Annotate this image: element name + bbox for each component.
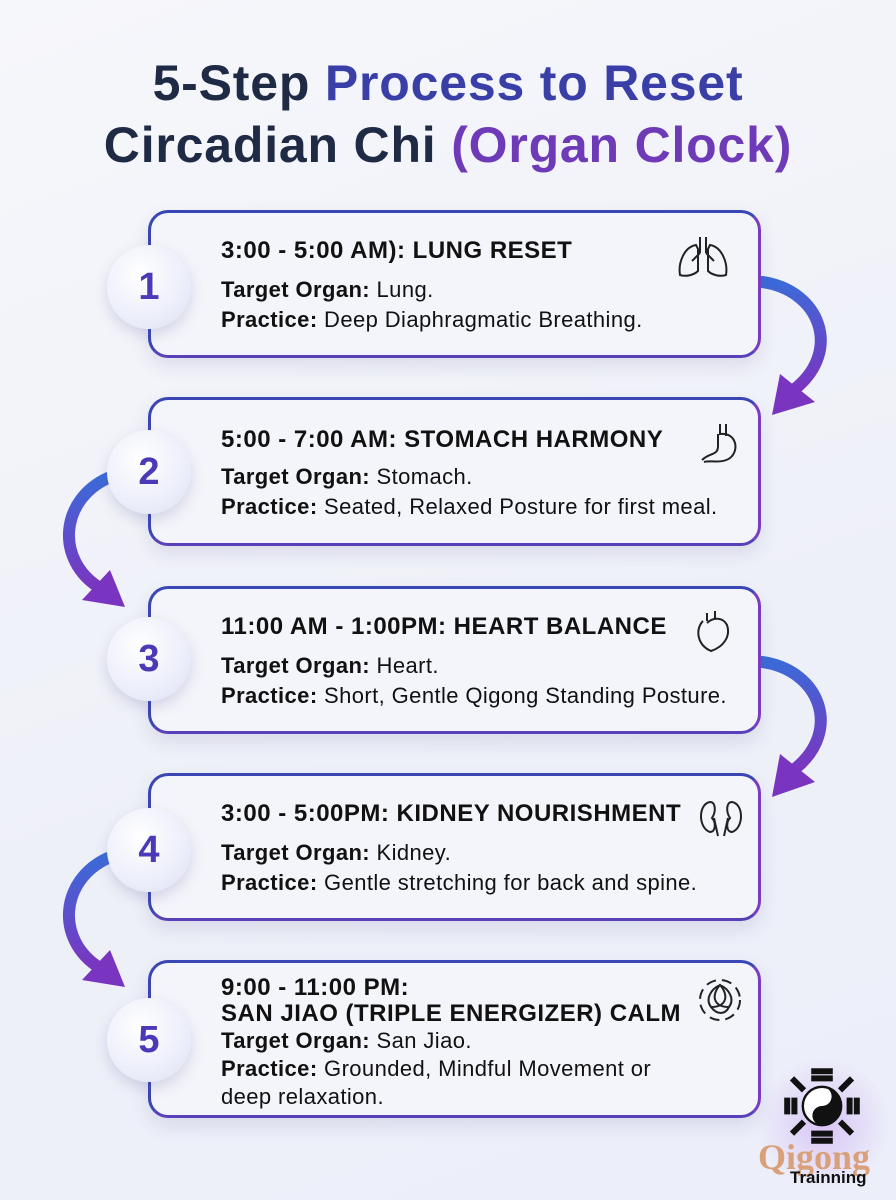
heading 5: 9:00 - 11:00 PM: bbox=[221, 974, 409, 1001]
icon: lungs bbox=[678, 237, 728, 277]
logo text: Qigong bbox=[758, 1137, 870, 1177]
title bbox=[104, 55, 792, 173]
text 4: Practice: Gentle stretching for back and spine. bbox=[221, 870, 697, 895]
icon: heart bbox=[697, 611, 730, 652]
title: Circadian Chi (Organ Clock) bbox=[104, 117, 792, 173]
circle 5 bbox=[107, 998, 191, 1082]
text 5: Target Organ: San Jiao. bbox=[221, 1028, 472, 1053]
heading 5: SAN JIAO (TRIPLE ENERGIZER) CALM bbox=[221, 1000, 681, 1027]
title: 5-Step Process to Reset bbox=[153, 55, 743, 111]
circle 1 bbox=[107, 245, 191, 329]
arrow 4 to 5 bbox=[69, 858, 125, 987]
text 4 bbox=[221, 840, 697, 895]
heading 3: 11:00 AM - 1:00PM: HEART BALANCE bbox=[221, 613, 667, 640]
logo bbox=[756, 1056, 892, 1192]
text 1: Practice: Deep Diaphragmatic Breathing. bbox=[221, 307, 643, 332]
panel: step 1 bbox=[148, 210, 761, 358]
text 1: Target Organ: Lung. bbox=[221, 277, 434, 302]
panel: step 3 bbox=[148, 586, 761, 734]
text 5 bbox=[221, 1028, 651, 1109]
logo mark bbox=[784, 1068, 860, 1144]
text 2: Practice: Seated, Relaxed Posture for first meal. bbox=[221, 494, 718, 519]
heading 1: 3:00 - 5:00 AM): LUNG RESET bbox=[221, 237, 572, 264]
arrow 1 to 2 bbox=[762, 282, 821, 415]
heading 4: 3:00 - 5:00PM: KIDNEY NOURISHMENT bbox=[221, 800, 681, 827]
icon: triple knot bbox=[699, 979, 741, 1021]
arrow 3 to 4 bbox=[762, 662, 821, 797]
text 3: Practice: Short, Gentle Qigong Standing Posture. bbox=[221, 683, 727, 708]
circle 4 bbox=[107, 808, 191, 892]
text 3: Target Organ: Heart. bbox=[221, 653, 439, 678]
circle 5: 5 bbox=[138, 1019, 160, 1061]
icon: stomach bbox=[701, 424, 736, 463]
text 2: Target Organ: Stomach. bbox=[221, 464, 473, 489]
text 4: Target Organ: Kidney. bbox=[221, 840, 451, 865]
circle 3: 3 bbox=[138, 638, 160, 680]
panel: step 4 bbox=[148, 773, 761, 921]
text 5: Practice: Grounded, Mindful Movement or bbox=[221, 1056, 651, 1081]
text 1 bbox=[221, 277, 643, 332]
circle 1: 1 bbox=[138, 266, 160, 308]
text 2 bbox=[221, 464, 718, 519]
heading 2: 5:00 - 7:00 AM: STOMACH HARMONY bbox=[221, 426, 663, 453]
icon: kidneys bbox=[700, 801, 742, 836]
text 5: deep relaxation. bbox=[221, 1084, 384, 1109]
panel: step 5 bbox=[148, 960, 761, 1118]
circle 2: 2 bbox=[138, 451, 160, 493]
circle 4: 4 bbox=[138, 829, 160, 871]
text 3 bbox=[221, 653, 727, 708]
arrow 2 to 3 bbox=[69, 478, 125, 607]
panel: step 2 bbox=[148, 397, 761, 546]
circle 3 bbox=[107, 617, 191, 701]
heading 5 bbox=[221, 974, 681, 1027]
circle 2 bbox=[107, 430, 191, 514]
logo: Trainning bbox=[790, 1168, 866, 1187]
